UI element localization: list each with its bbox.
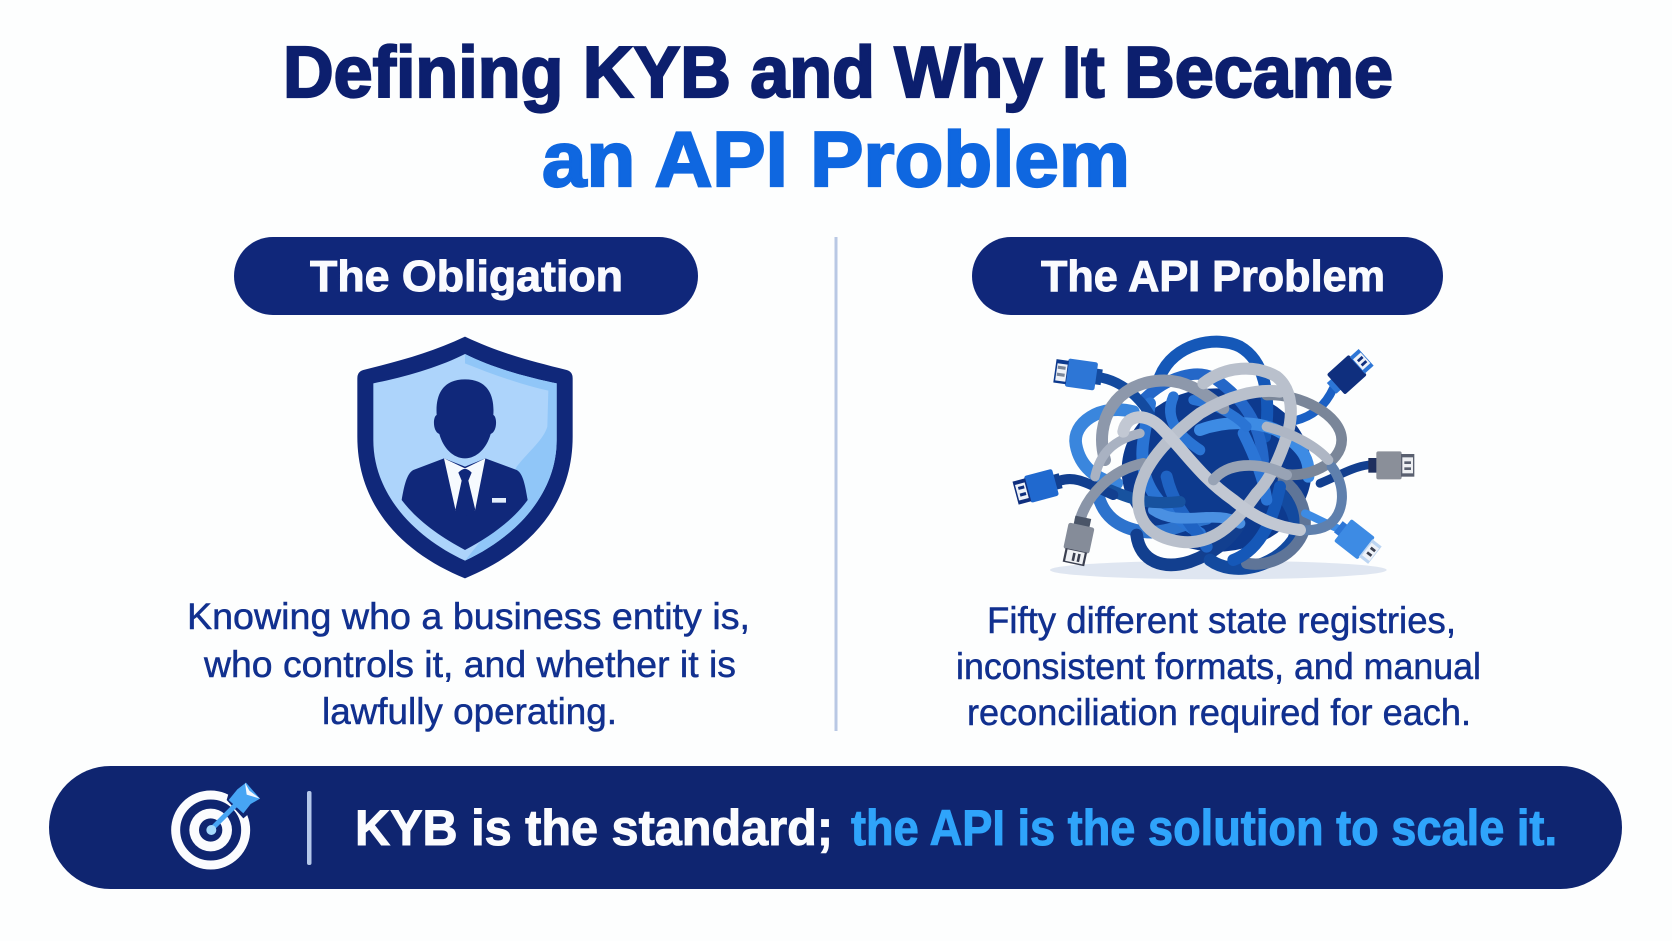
heading pill: the api problem: The API Problem [1041, 252, 1385, 301]
text: obligation description: who controls it, and whether it is [203, 644, 736, 685]
heading pill: the api problem [972, 237, 1443, 315]
divider between panels [834, 237, 838, 731]
text: obligation description [187, 596, 750, 732]
text: banner message: the API is the solution to scale it. [851, 800, 1557, 856]
heading pill: the obligation [234, 237, 698, 315]
connector: right [1368, 451, 1414, 479]
heading pill: the obligation: The Obligation [310, 252, 623, 301]
text: banner message: KYB is the standard; [355, 800, 833, 856]
text: obligation description: Knowing who a business entity is, [187, 596, 750, 637]
title: an API Problem [542, 115, 1130, 203]
banner vertical separator [307, 791, 312, 865]
connector: left [1012, 467, 1064, 506]
icon: shield with business person [357, 337, 573, 578]
connector: bottom right [1330, 516, 1384, 566]
title [283, 33, 1393, 203]
callout: bottom banner [49, 766, 1622, 889]
connector: top right [1323, 347, 1375, 398]
text: obligation description: lawfully operating. [322, 691, 617, 732]
icon: tangled cables [1012, 342, 1414, 579]
text: banner message [355, 800, 1557, 856]
text: api problem description: inconsistent formats, and manual [956, 646, 1481, 687]
icon: target with arrow [176, 783, 260, 865]
connector: bottom left [1061, 515, 1096, 567]
text: api problem description [956, 600, 1481, 733]
title: Defining KYB and Why It Became [283, 33, 1393, 113]
connector: top left [1053, 357, 1104, 391]
text: api problem description: Fifty different state registries, [987, 600, 1456, 641]
text: api problem description: reconciliation required for each. [967, 692, 1471, 733]
panel: the api problem [956, 237, 1481, 733]
panel: the obligation [187, 237, 750, 732]
